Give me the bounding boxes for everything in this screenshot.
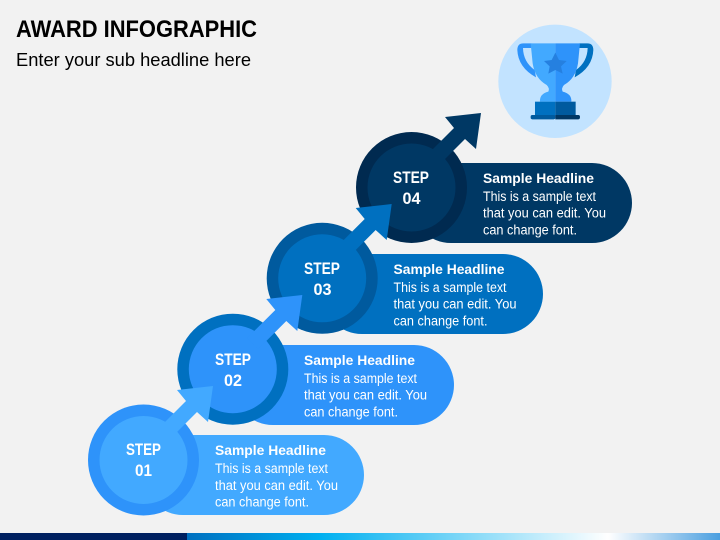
icon: trophy: [498, 25, 612, 138]
step 02 pill: [233, 345, 454, 425]
step 02: [177, 295, 454, 425]
arrow: step 03: [337, 204, 392, 258]
step 02 label: STEP: [215, 351, 251, 369]
step 01 text: Sample Headline: [215, 442, 326, 458]
step 01 text: [215, 442, 338, 510]
subtitle: Enter your sub headline here: [16, 50, 251, 70]
step 03 label: [304, 260, 340, 299]
step 04 text: This is a sample text: [483, 189, 596, 204]
step 01 circle: [88, 404, 199, 516]
step 02 text: This is a sample text: [304, 371, 417, 386]
step 01: [88, 386, 364, 516]
step 04 label: STEP: [393, 169, 429, 187]
step 03 text: can change font.: [394, 314, 488, 328]
step 03 text: [394, 261, 516, 328]
step 04 label: 04: [402, 190, 421, 208]
step 04 text: [483, 170, 606, 238]
step 03 label: 03: [314, 281, 332, 299]
title: AWARD INFOGRAPHIC: [16, 16, 257, 43]
step 02 label: 02: [224, 372, 242, 390]
step 02 text: that you can edit. You: [304, 388, 427, 402]
step 03 text: Sample Headline: [394, 261, 505, 277]
step 04 text: can change font.: [483, 222, 577, 238]
footer bar: [0, 533, 720, 540]
step 01 label: 01: [135, 462, 152, 480]
step 04 text: Sample Headline: [483, 170, 594, 186]
step 03 text: that you can edit. You: [394, 296, 516, 312]
step 01 text: can change font.: [215, 494, 309, 510]
step 04 label: [393, 169, 429, 208]
arrow: step 02: [247, 295, 302, 349]
step 01 text: This is a sample text: [215, 461, 328, 476]
step 04 text: that you can edit. You: [483, 206, 606, 220]
step 02 text: can change font.: [304, 404, 398, 420]
step 03 label: STEP: [304, 260, 340, 278]
step 01 label: STEP: [126, 441, 161, 459]
step 03: [267, 204, 543, 334]
step 02 text: Sample Headline: [304, 352, 415, 368]
step 03 pill: [322, 254, 543, 334]
step 03 text: This is a sample text: [394, 280, 507, 295]
step 04: [356, 113, 632, 243]
step 02 circle: [177, 314, 288, 425]
step 02 label: [215, 351, 251, 390]
step 04 circle: [356, 132, 467, 243]
step 03 circle: [267, 223, 378, 334]
step 02 text: [304, 352, 427, 420]
step 04 pill: [411, 163, 632, 243]
arrow: step 01: [158, 386, 213, 440]
step 01 text: that you can edit. You: [215, 478, 338, 493]
step 01 label: [126, 441, 161, 480]
arrow: step 04: [426, 113, 481, 167]
step 01 pill: [143, 435, 364, 515]
